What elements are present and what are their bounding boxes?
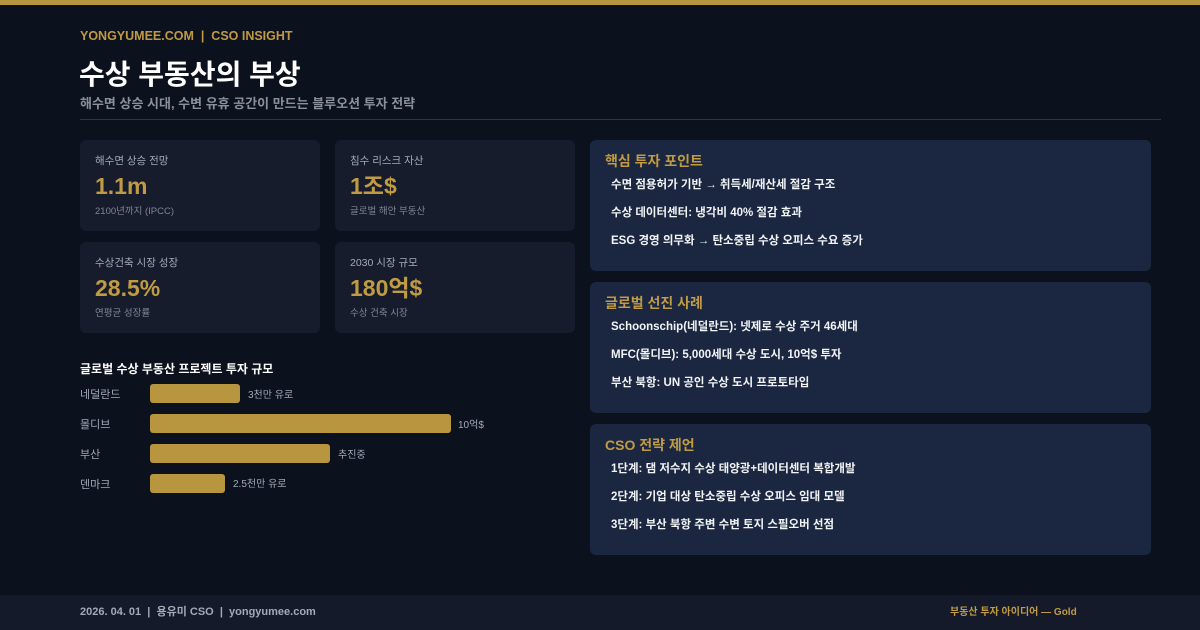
chart title: 글로벌 수상 부동산 프로젝트 투자 규모	[80, 362, 273, 376]
panel: key points: 수상 데이터센터: 냉각비 40% 절감 효과	[611, 207, 802, 219]
footer: 부동산 투자 아이디어 — Gold	[950, 607, 1077, 618]
panel: global cases: 부산 북항: UN 공인 수상 도시 프로토타입	[611, 377, 809, 389]
bar chart: 2.5천만 유로	[233, 479, 286, 490]
bar chart: 덴마크	[80, 479, 110, 491]
stat card: sea level: 1.1m	[95, 173, 147, 199]
bar chart: 10억$	[458, 420, 484, 431]
bar chart	[80, 362, 484, 493]
panel: key points: 핵심 투자 포인트	[605, 153, 703, 169]
panel: CSO strategy	[590, 424, 1151, 555]
panel: key points	[590, 140, 1151, 271]
bar chart: 3천만 유로	[248, 390, 293, 401]
panel: global cases: MFC(몰디브): 5,000세대 수상 도시, 10억$ 투자	[611, 349, 842, 361]
bar chart: 부산	[80, 449, 100, 461]
footer	[0, 595, 1200, 630]
stat card: growth: 연평균 성장률	[95, 308, 150, 319]
stat card: growth: 수상건축 시장 성장	[95, 257, 178, 269]
stat card: sea level: 2100년까지 (IPCC)	[95, 206, 174, 217]
stat card: sea level	[80, 140, 320, 231]
stat card: growth	[80, 242, 320, 333]
panel: CSO strategy: 1단계: 댐 저수지 수상 태양광+데이터센터 복합개발	[611, 463, 856, 475]
panel: CSO strategy: 3단계: 부산 북항 주변 수변 토지 스필오버 선점	[611, 519, 834, 531]
stat card: sea level: 해수면 상승 전망	[95, 155, 168, 167]
stat card: flood risk: 침수 리스크 자산	[350, 155, 423, 167]
bar chart: 네덜란드	[80, 389, 120, 401]
subtitle: 해수면 상승 시대, 수변 유휴 공간이 만드는 블루오션 투자 전략	[80, 96, 415, 111]
stat card: 2030 market: 180억$	[350, 275, 422, 301]
top accent bar	[0, 0, 1200, 5]
stat card: flood risk: 1조$	[350, 173, 397, 199]
panel: global cases	[590, 282, 1151, 413]
brand line: YONGYUMEE.COM | CSO INSIGHT	[80, 29, 293, 43]
panel: CSO strategy: 2단계: 기업 대상 탄소중립 수상 오피스 임대 모델	[611, 491, 845, 503]
stat card: growth: 28.5%	[95, 275, 160, 301]
footer: 2026. 04. 01 | 용유미 CSO | yongyumee.com	[80, 606, 316, 618]
panel: global cases: 글로벌 선진 사례	[605, 295, 703, 311]
panel: key points: 수면 점용허가 기반 → 취득세/재산세 절감 구조	[611, 179, 835, 191]
bar chart: 몰디브	[80, 419, 110, 431]
title: 수상 부동산의 부상	[79, 59, 301, 90]
stat card: flood risk: 글로벌 해안 부동산	[350, 206, 425, 217]
bar chart: 추진중	[338, 450, 366, 461]
stat card: flood risk	[335, 140, 575, 231]
panel: CSO strategy: CSO 전략 제언	[605, 437, 695, 453]
stat card: 2030 market: 수상 건축 시장	[350, 308, 408, 319]
stat card: 2030 market: 2030 시장 규모	[350, 257, 418, 269]
stat card: 2030 market	[335, 242, 575, 333]
panel: global cases: Schoonschip(네덜란드): 넷제로 수상 주거 46세대	[611, 321, 858, 333]
panel: key points: ESG 경영 의무화 → 탄소중립 수상 오피스 수요 증가	[611, 235, 863, 247]
